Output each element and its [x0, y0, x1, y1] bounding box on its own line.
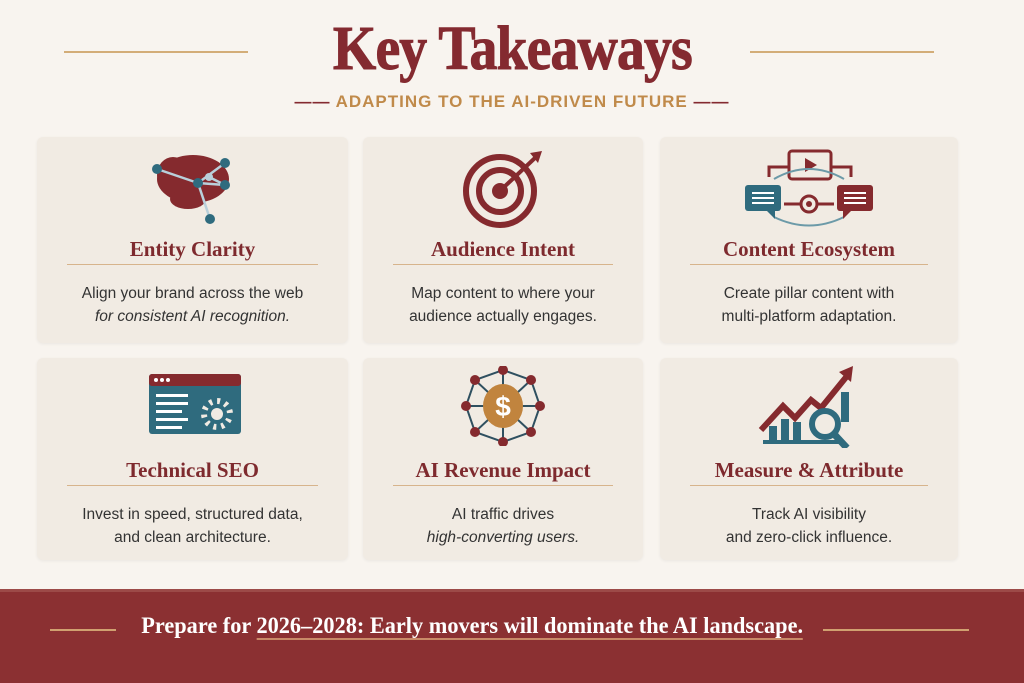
- panel: Technical SEO: and clean architecture.: [114, 529, 271, 546]
- panel: Technical SEO: Technical SEO: [126, 458, 259, 482]
- title: Key Takeaways: [333, 15, 691, 83]
- panel: Content Ecosystem: [660, 137, 958, 343]
- panel: AI Revenue Impact: AI traffic drives: [452, 506, 554, 523]
- icon: target: [463, 151, 542, 228]
- panel: Measure & Attribute: and zero-click influence.: [726, 529, 892, 546]
- icon: brain: [152, 155, 230, 224]
- footer text: Prepare for 2026–2028: Early movers will dominate the AI landscape.: [141, 613, 803, 638]
- icon: dollar network: $: [495, 391, 511, 422]
- panel: Technical SEO: [37, 358, 348, 560]
- icon: content network: [745, 150, 873, 226]
- panel: Technical SEO: Invest in speed, structured data,: [82, 506, 303, 523]
- footer banner: [0, 589, 1024, 683]
- panel: AI Revenue Impact: high-converting users.: [427, 529, 579, 546]
- icon: chart magnifier: [758, 366, 853, 448]
- panel: AI Revenue Impact: AI Revenue Impact: [416, 458, 590, 482]
- panel: AI Revenue Impact: [363, 358, 643, 560]
- panel: Measure & Attribute: Track AI visibility: [752, 506, 866, 523]
- panel: Audience Intent: [363, 137, 643, 343]
- panel: Measure & Attribute: [660, 358, 958, 560]
- panel: Entity Clarity: for consistent AI recognition.: [95, 308, 290, 325]
- panel: Audience Intent: Audience Intent: [431, 237, 575, 261]
- panel: Entity Clarity: Entity Clarity: [130, 237, 255, 261]
- icon: dollar network: [461, 366, 545, 446]
- panel: Content Ecosystem: Content Ecosystem: [723, 237, 895, 261]
- subtitle: —— ADAPTING TO THE AI-DRIVEN FUTURE ——: [294, 92, 730, 111]
- panel: Entity Clarity: Align your brand across the web: [82, 285, 303, 302]
- panel: Entity Clarity: [37, 137, 348, 343]
- panel: Audience Intent: Map content to where your: [411, 285, 595, 302]
- panel: Audience Intent: audience actually engages.: [409, 308, 597, 325]
- panel: Content Ecosystem: Create pillar content with: [724, 285, 894, 302]
- icon: browser gear: [149, 374, 241, 434]
- panel: Measure & Attribute: Measure & Attribute: [715, 458, 903, 482]
- panel: Content Ecosystem: multi-platform adaptation.: [722, 308, 896, 325]
